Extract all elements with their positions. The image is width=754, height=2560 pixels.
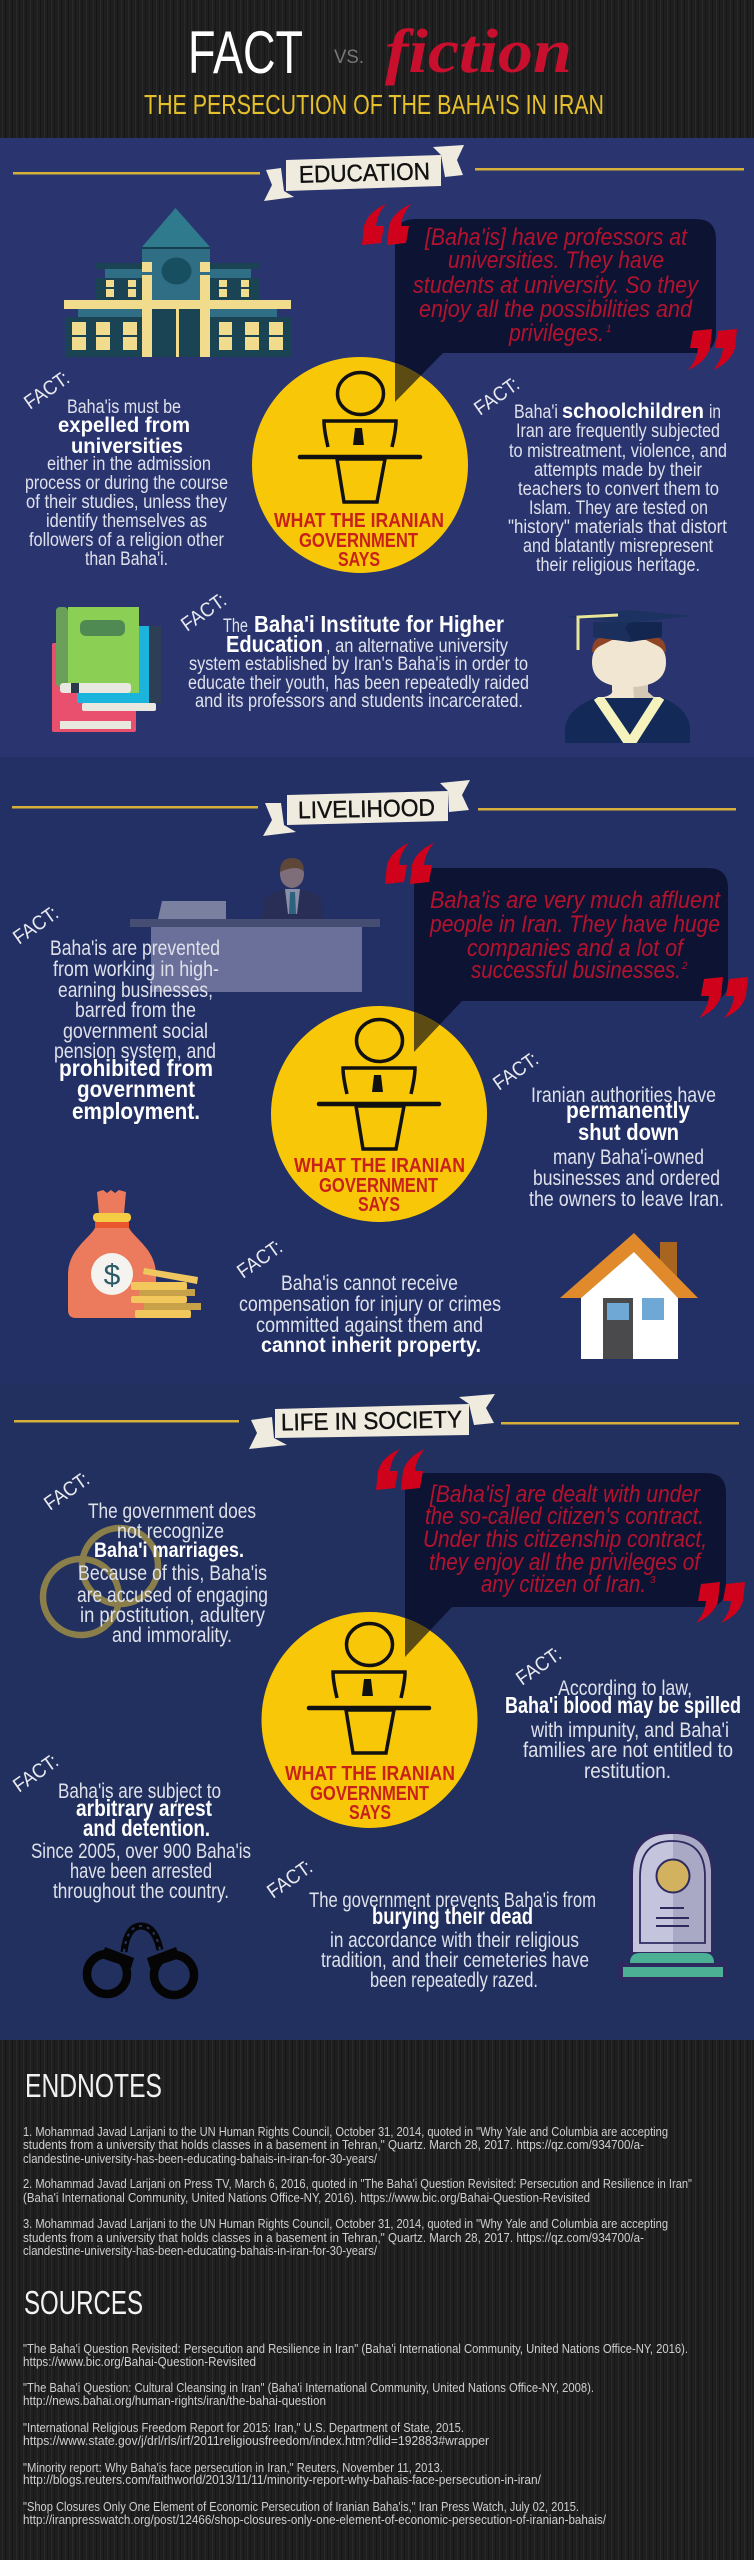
fact: schoolchildren: Islam. They are tested on (529, 498, 708, 519)
footer background (0, 2040, 754, 2560)
fact: marriages not recognized: are accused of engaging (77, 1584, 268, 1607)
section background: education (0, 138, 754, 757)
section heading: education (13, 145, 744, 201)
sources text: http://blogs.reuters.com/faithworld/2013/11/11/minority-report-why-bahais-face-persecution-in-iran/ (23, 2472, 541, 2487)
fact: burying their dead: The government prevents Baha'is from (309, 1889, 596, 1912)
bubble tail over circle (414, 1012, 440, 1052)
quote text: livelihood (429, 887, 721, 984)
fact: schoolchildren: in (709, 402, 721, 423)
fact: prohibited from government employment: barred from the (75, 999, 196, 1022)
quote text: life in society: 3 (650, 1575, 656, 1586)
fact: institute for higher education: Education (226, 631, 323, 657)
circle caption: GOVERNMENT (310, 1783, 429, 1805)
fact: institute for higher education: system established by Iran's Baha'is in order to (189, 654, 528, 675)
icon: speaker at podium (300, 372, 420, 502)
sources text: "Minority report: Why Baha'is face persecution in Iran," Reuters, November 11, 2013. (23, 2460, 443, 2475)
quote text: livelihood: companies and a lot of (467, 935, 685, 962)
fact: schoolchildren: teachers to convert them to (518, 479, 719, 500)
icon: wedding rings (43, 1528, 158, 1635)
icon: person at office desk (130, 858, 380, 992)
yellow circle: livelihood (271, 1006, 487, 1222)
fact: expelled from universities: of their studies, unless they (26, 492, 227, 513)
fact: marriages not recognized: not recognize (117, 1520, 224, 1543)
opening quote mark (385, 843, 434, 884)
quote text: livelihood: 2 (681, 961, 688, 972)
fact: marriages not recognized: FACT: (40, 1468, 94, 1515)
quote text: life in society: [Baha'is] are dealt with under (429, 1481, 701, 1508)
closing quote mark (688, 329, 737, 370)
fact: expelled from universities: Baha'is must be (67, 397, 181, 418)
fact: expelled from universities: expelled from (58, 414, 190, 437)
fact: expelled from universities: identify themselves as (46, 511, 207, 532)
quote bubble: life in society (405, 1473, 726, 1657)
fact: expelled from universities: either in the admission (47, 454, 211, 475)
icon: house (560, 1233, 698, 1359)
quote text: life in society: the so-called citizen's contract. (425, 1503, 704, 1530)
sources text: "Shop Closures Only One Element of Economic Persecution of Iranian Baha'is," Iran Press Watch, July 02, 2015. (23, 2499, 579, 2514)
fact: permanently shut down: businesses and ordered (533, 1167, 720, 1190)
heading: sources: SOURCES (24, 2284, 143, 2321)
fact: schoolchildren: FACT: (470, 373, 524, 420)
title: FACT (188, 19, 303, 86)
fact: institute for higher education: FACT: (177, 589, 231, 636)
quote text: education: enjoy all the possibilities and (419, 296, 693, 323)
fact: prohibited from government employment: prohibited from (59, 1055, 213, 1081)
title: VS. (334, 47, 364, 68)
fact: prohibited from government employment: Baha'is are prevented (50, 937, 220, 960)
quote text: life in society: any citizen of Iran. (481, 1571, 646, 1598)
fact: burying their dead: in accordance with their religious (330, 1929, 579, 1952)
fact: institute for higher education (177, 589, 529, 712)
fact: schoolchildren: and blatantly misrepresent (523, 536, 714, 557)
fact: blood may be spilled: FACT: (512, 1643, 566, 1690)
fact: permanently shut down (489, 1048, 724, 1211)
fact: institute for higher education: Baha'i Institute for Higher (254, 611, 504, 637)
fact: cannot inherit property: FACT: (233, 1236, 287, 1283)
fact: expelled from universities: than Baha'i. (85, 549, 168, 570)
fact: arbitrary arrest: have been arrested (70, 1860, 212, 1883)
fact: permanently shut down: Iranian authorities have (531, 1084, 716, 1107)
endnotes text: (Baha'i International Community, United Nations Office-NY, 2016). https://www.bic.org/Bahai-Question-Revisited (23, 2190, 590, 2205)
fact: prohibited from government employment: from working in high- (53, 958, 219, 981)
circle caption (274, 510, 444, 571)
title (188, 18, 572, 86)
circle caption: SAYS (338, 549, 380, 571)
circle caption: GOVERNMENT (299, 530, 418, 552)
circle caption (294, 1155, 465, 1216)
circle caption: WHAT THE IRANIAN (285, 1763, 455, 1785)
fact: blood may be spilled (505, 1643, 741, 1783)
fact: schoolchildren (470, 373, 728, 576)
quote text: education: universities. They have (448, 247, 664, 274)
fact: marriages not recognized: The government does (88, 1500, 256, 1523)
quote text: life in society (423, 1481, 707, 1598)
fact: permanently shut down: FACT: (489, 1048, 543, 1095)
fact: schoolchildren: Iran are frequently subjected (516, 421, 720, 442)
circle caption: WHAT THE IRANIAN (294, 1155, 465, 1177)
icon: stack of books (52, 607, 161, 732)
fact: cannot inherit property: cannot inherit property. (261, 1334, 481, 1357)
icon: handcuffs (87, 1926, 194, 1995)
fact: marriages not recognized: Baha'i marriages. (94, 1539, 244, 1562)
circle caption (285, 1763, 455, 1824)
fact: schoolchildren: Baha'i (514, 402, 558, 423)
closing quote mark (699, 977, 748, 1018)
fact: arbitrary arrest: arbitrary arrest (76, 1795, 212, 1821)
quote text: livelihood: people in Iran. They have huge (429, 911, 720, 938)
yellow circle: education (252, 357, 468, 573)
endnotes text (23, 2124, 692, 2258)
fact: prohibited from government employment: pension system, and (54, 1040, 216, 1063)
fact: prohibited from government employment: earning businesses, (58, 979, 213, 1002)
icon: money bag and coins (68, 1190, 201, 1318)
quote bubble: education (395, 219, 716, 402)
fact: permanently shut down: permanently (566, 1097, 690, 1123)
fact: institute for higher education: The (223, 616, 248, 637)
quote text: livelihood: Baha'is are very much affluent (430, 887, 721, 914)
fact: cannot inherit property: compensation for injury or crimes (239, 1293, 501, 1316)
sources text (23, 2341, 688, 2527)
fact: institute for higher education: , an alternative university (326, 636, 508, 657)
section heading: life in society (14, 1394, 739, 1449)
fact: expelled from universities: followers of a religion other (29, 530, 225, 551)
icon: speaker at podium (319, 1020, 439, 1149)
fact: burying their dead (263, 1856, 596, 1992)
endnotes text: students from a university that holds classes in a basement in Tehran," Quartz. March 28, 2017. https://qz.com/934700/a- (23, 2230, 644, 2245)
icon: money bag and coins: $ (104, 1259, 121, 1292)
fact: expelled from universities (20, 367, 228, 570)
circle caption: SAYS (358, 1194, 400, 1216)
bubble tail over circle (395, 363, 420, 402)
fact: burying their dead: been repeatedly razed. (370, 1969, 538, 1992)
fact: prohibited from government employment: government (77, 1076, 195, 1102)
closing quote mark (696, 1582, 745, 1623)
quote bubble: livelihood (414, 868, 728, 1052)
fact: arbitrary arrest: Since 2005, over 900 Baha'is (31, 1840, 251, 1863)
section heading: education: EDUCATION (299, 158, 430, 189)
fact: expelled from universities: FACT: (20, 367, 74, 414)
icon: gravestone (618, 1831, 727, 1980)
fact: marriages not recognized: in prostitution, adultery (80, 1604, 265, 1627)
opening quote mark (362, 204, 411, 245)
section heading: life in society: LIFE IN SOCIETY (281, 1406, 462, 1437)
heading: endnotes: ENDNOTES (25, 2067, 162, 2104)
quote text: education: 1 (606, 324, 612, 335)
endnotes text: clandestine-university-has-been-educating-bahais-in-iran-for-30-years/ (23, 2243, 377, 2258)
quote text: life in society: they enjoy all the privileges of (429, 1549, 702, 1576)
fact: schoolchildren: their religious heritage. (536, 555, 700, 576)
fact: prohibited from government employment: FACT: (9, 902, 63, 949)
sources text: https://www.bic.org/Bahai-Question-Revisited (23, 2354, 256, 2369)
fact: arbitrary arrest: FACT: (9, 1750, 63, 1797)
fact: blood may be spilled: According to law, (558, 1677, 692, 1700)
fact: cannot inherit property: committed against them and (256, 1314, 483, 1337)
quote text: livelihood: successful businesses. (471, 957, 681, 984)
fact: prohibited from government employment (9, 902, 220, 1124)
quote text: life in society: Under this citizenship contract, (423, 1526, 707, 1553)
fact: arbitrary arrest: Baha'is are subject to (58, 1780, 221, 1803)
fact: schoolchildren: attempts made by their (534, 460, 703, 481)
sources text: "The Baha'i Question: Cultural Cleansing in Iran" (Baha'i International Community, United Nations Office-NY, 2008). (23, 2380, 594, 2395)
endnotes text: clandestine-university-has-been-educating-bahais-in-iran-for-30-years/ (23, 2151, 377, 2166)
fact: marriages not recognized: and immorality. (112, 1624, 232, 1647)
title: fiction (385, 18, 572, 86)
sources text: http://news.bahai.org/human-rights/iran/the-bahai-question (23, 2393, 326, 2408)
fact: institute for higher education: educate their youth, has been repeatedly raided (188, 673, 529, 694)
circle caption: GOVERNMENT (319, 1175, 438, 1197)
circle caption: WHAT THE IRANIAN (274, 510, 444, 532)
fact: cannot inherit property (233, 1236, 501, 1357)
fact: marriages not recognized: Because of this, Baha'is (78, 1562, 267, 1585)
fact: schoolchildren: "history" materials that distort (508, 517, 728, 538)
fact: burying their dead: tradition, and their cemeteries have (321, 1949, 589, 1972)
fact: permanently shut down: shut down (578, 1119, 679, 1145)
fact: marriages not recognized (40, 1468, 268, 1647)
header background (0, 0, 754, 138)
fact: prohibited from government employment: government social (63, 1020, 208, 1043)
endnotes text: students from a university that holds classes in a basement in Tehran," Quartz. March 28, 2017. https://qz.com/934700/a- (23, 2137, 644, 2152)
quote text: education: privileges. (508, 320, 604, 347)
fact: blood may be spilled: restitution. (584, 1760, 671, 1783)
fact: schoolchildren: schoolchildren (562, 400, 704, 423)
fact: prohibited from government employment: employment. (72, 1098, 200, 1124)
fact: burying their dead: burying their dead (372, 1903, 533, 1929)
fact: expelled from universities: process or during the course (25, 473, 228, 494)
bubble tail over circle (405, 1618, 430, 1657)
yellow circle: life in society (262, 1612, 478, 1828)
fact: permanently shut down: the owners to leave Iran. (529, 1188, 724, 1211)
fact: arbitrary arrest: and detention. (83, 1815, 210, 1841)
fact: cannot inherit property: Baha'is cannot receive (281, 1272, 458, 1295)
section background: livelihood (0, 757, 754, 1384)
opening quote mark (376, 1449, 425, 1490)
fact: permanently shut down: many Baha'i-owned (553, 1146, 704, 1169)
subtitle: THE PERSECUTION OF THE BAHA'IS IN IRAN (144, 89, 604, 120)
fact: institute for higher education: and its professors and students incarcerated. (195, 691, 523, 712)
section background: life in society (0, 1384, 754, 2040)
section heading: livelihood (12, 780, 736, 836)
quote text: education (413, 224, 700, 347)
fact: arbitrary arrest: throughout the country. (53, 1880, 229, 1903)
sources text: http://iranpresswatch.org/post/12466/shop-closures-only-one-element-of-economic-persecution-of-iranian-bahais/ (23, 2512, 606, 2527)
section heading: livelihood: LIVELIHOOD (298, 795, 435, 824)
circle caption: SAYS (349, 1802, 391, 1824)
fact: expelled from universities: universities (71, 435, 183, 458)
icon: graduate (565, 610, 692, 744)
icon: speaker at podium (309, 1624, 429, 1753)
icon: university building (64, 208, 291, 357)
sources text: https://www.state.gov/j/drl/rls/irf/2011religiousfreedom/index.htm?dlid=192883#wrapper (23, 2433, 490, 2448)
fact: arbitrary arrest (9, 1750, 251, 1903)
sources text: "International Religious Freedom Report for 2015: Iran," U.S. Department of State, 2015. (23, 2420, 464, 2435)
fact: burying their dead: FACT: (263, 1856, 317, 1903)
quote text: education: [Baha'is] have professors at (424, 224, 688, 251)
quote text: education: students at university. So they (413, 272, 700, 299)
